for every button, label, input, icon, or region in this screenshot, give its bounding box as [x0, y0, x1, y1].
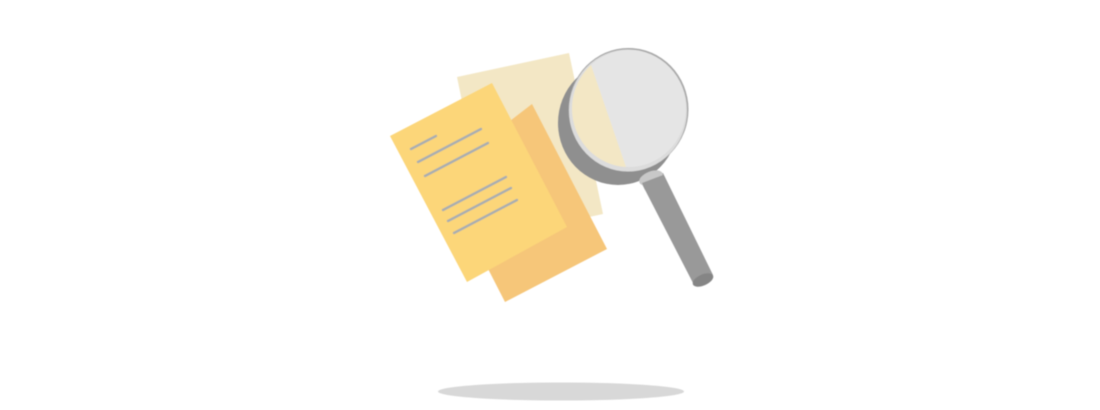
- handle collar: [637, 167, 665, 189]
- magnifier rim highlight: [569, 50, 687, 172]
- paper: yellow front sheet: [390, 83, 567, 282]
- ground shadow: [438, 382, 684, 400]
- paper: orange middle sheet: [440, 104, 607, 302]
- magnifier rim: [568, 48, 688, 171]
- handle end cap: [691, 271, 715, 289]
- icon: magnifying glass: [558, 48, 715, 289]
- magnifier glass: [572, 50, 686, 167]
- text lines on yellow sheet: [411, 129, 517, 233]
- beige sheet seen through glass: [572, 65, 626, 167]
- magnifier handle: [641, 173, 715, 289]
- magnifier lens back edge: [558, 61, 678, 185]
- paper: beige back sheet: [457, 53, 603, 232]
